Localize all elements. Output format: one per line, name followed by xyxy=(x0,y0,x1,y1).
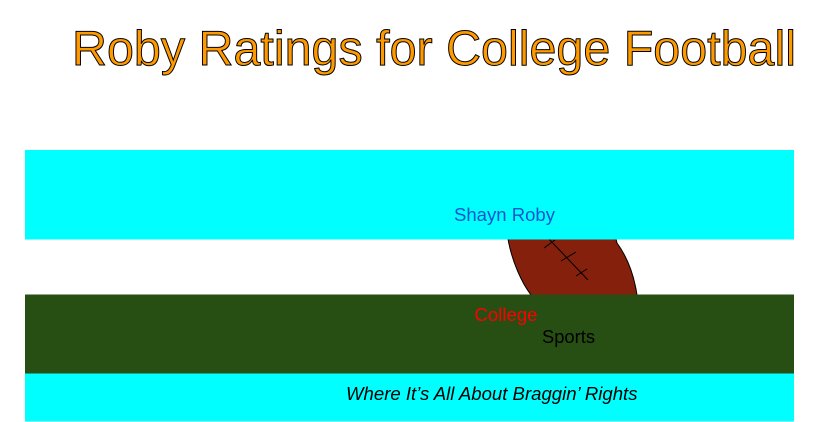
author name: Shayn Roby xyxy=(454,205,555,225)
top cyan band xyxy=(25,150,794,240)
football body xyxy=(508,239,637,295)
bottom cyan band xyxy=(25,374,794,422)
tagline: Where It’s All About Braggin’ Rights xyxy=(346,384,638,404)
sports label: Sports xyxy=(542,327,595,347)
college label: College xyxy=(474,305,538,325)
title: Roby Ratings for College Football xyxy=(72,21,796,76)
green field band xyxy=(25,294,794,374)
football xyxy=(508,238,637,295)
football laces xyxy=(544,238,588,280)
